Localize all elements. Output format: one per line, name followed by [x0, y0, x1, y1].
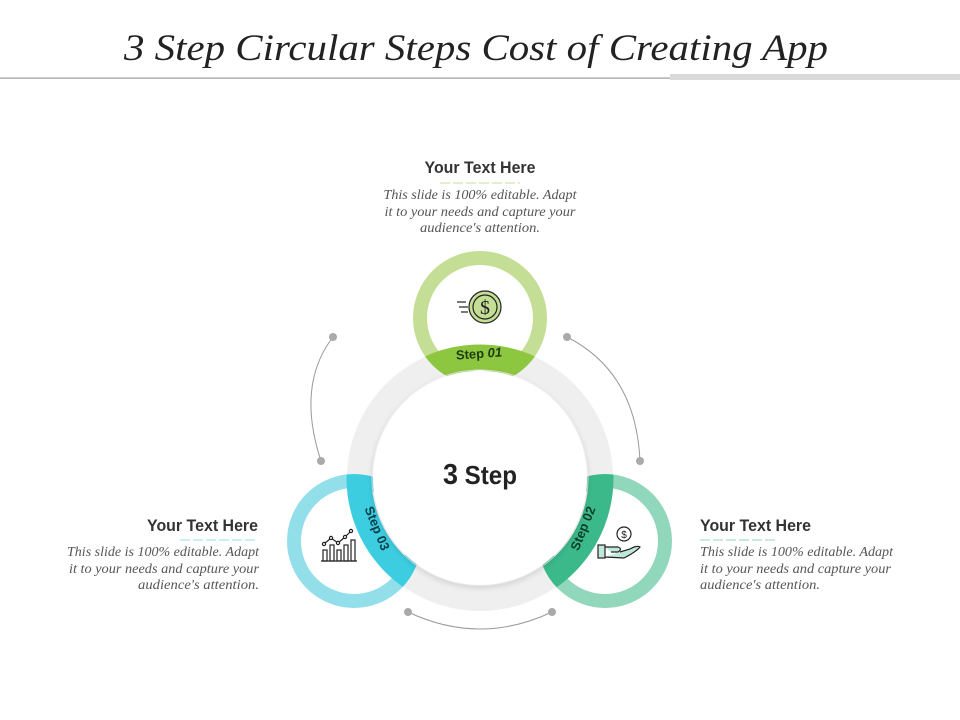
icon: bar chart [321, 529, 357, 561]
icon: dollar coin: $ [480, 297, 490, 319]
center label: 3 Step [443, 459, 517, 491]
title: 3 Step Circular Steps Cost of Creating App [123, 28, 828, 69]
text block left: Your Text Here [147, 517, 258, 535]
step 02 label: Step 02 [567, 504, 598, 553]
central ring [359, 357, 601, 599]
connector arc left [311, 333, 337, 465]
icon: dollar coin [457, 291, 501, 323]
text block left [67, 517, 260, 592]
text block top: it to your needs and capture your [384, 204, 576, 219]
text block left: it to your needs and capture your [69, 561, 260, 576]
icon: hand with coin: $ [621, 530, 627, 541]
step 01 label: Step 01 [455, 344, 503, 363]
icon: hand with coin [598, 527, 640, 558]
text block left: This slide is 100% editable. Adapt [67, 544, 260, 559]
connector arc right [563, 333, 644, 465]
text block top: Your Text Here [424, 159, 536, 177]
step 01 ring [420, 258, 540, 378]
text block right: audience's attention. [700, 577, 820, 592]
step 03 label: Step 03 [362, 504, 393, 553]
text block right: This slide is 100% editable. Adapt [700, 544, 894, 559]
connector arc bottom [404, 608, 556, 629]
text block left: audience's attention. [138, 577, 259, 592]
header rule [0, 74, 960, 80]
text block top: audience's attention. [420, 220, 540, 235]
text block right [700, 517, 894, 592]
text block right: Your Text Here [700, 517, 811, 535]
step 03 ring [294, 481, 414, 601]
text block right: it to your needs and capture your [700, 561, 892, 576]
step 02 ring [545, 481, 665, 601]
text block top [384, 159, 578, 235]
text block top: This slide is 100% editable. Adapt [384, 187, 578, 202]
